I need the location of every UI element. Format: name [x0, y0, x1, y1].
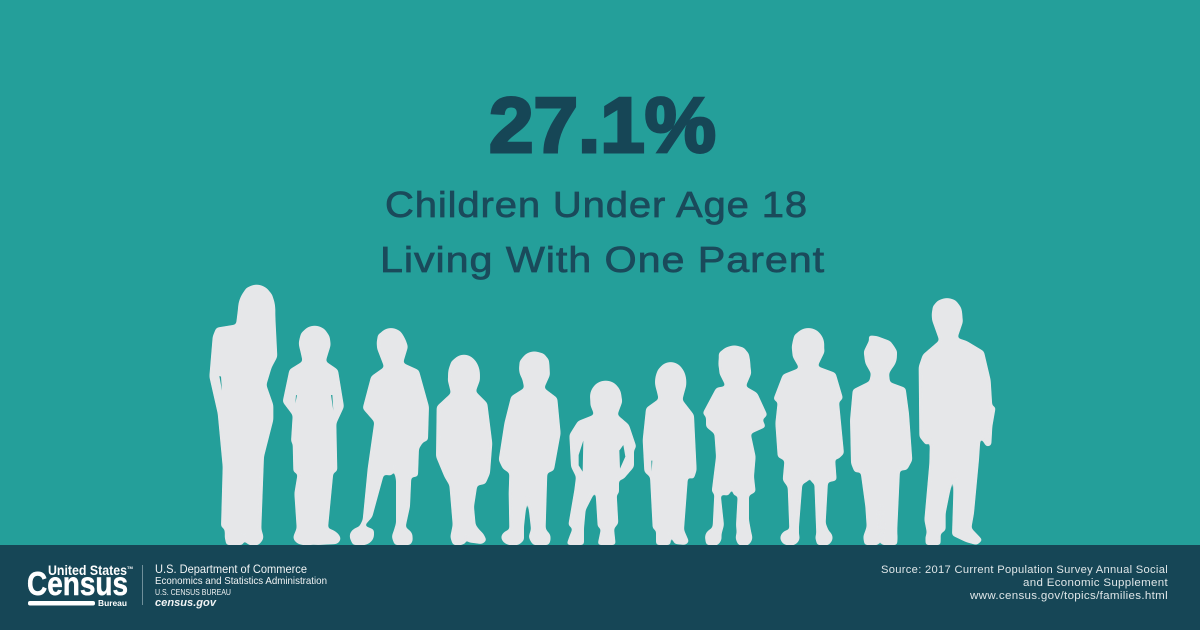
logo: United States Census Bureau wordmark: Census [27, 565, 128, 602]
logo divider [142, 565, 143, 605]
subtitle line 1: Children Under Age 18 [385, 184, 808, 225]
silhouette: child in long top [643, 363, 696, 544]
silhouette: tall girl with long hair [210, 285, 277, 545]
logo: United States Census Bureau wordmark: Bureau [98, 598, 127, 608]
silhouette: boy in t-shirt and shorts [774, 329, 843, 545]
silhouette: child in shorts [283, 326, 343, 546]
logo: United States Census Bureau wordmark: United States [48, 563, 127, 578]
subtitle line 2: Living With One Parent [380, 239, 825, 280]
source note [881, 564, 1168, 602]
arm gaps in silhouettes [219, 376, 652, 472]
silhouette: boy in long trousers [499, 352, 560, 545]
source note: www.census.gov/topics/families.html [969, 590, 1168, 602]
logo: United States Census Bureau wordmark: TM [127, 565, 133, 570]
agency block: U.S. Department of Commerce [155, 562, 307, 576]
agency block: U.S. CENSUS BUREAU [155, 587, 231, 597]
silhouette: girl in dress [437, 355, 492, 546]
silhouette: boy mid-stride [350, 329, 428, 545]
agency block: census.gov [155, 597, 217, 609]
agency block [155, 562, 327, 609]
headline statistic: 27.1% [489, 81, 716, 169]
silhouette: boy in t-shirt, arms folded [703, 346, 767, 545]
footer band [0, 545, 1200, 630]
source note: Source: 2017 Current Population Survey Annual Social [881, 564, 1168, 576]
silhouette: small boy hands on hips [567, 381, 636, 544]
silhouette: boy with tousled hair [851, 336, 912, 545]
silhouette: tall teen boy [919, 299, 995, 545]
agency block: Economics and Statistics Administration [155, 575, 327, 587]
silhouettes: row of children and teen [210, 285, 995, 546]
source note: and Economic Supplement [1023, 577, 1168, 589]
